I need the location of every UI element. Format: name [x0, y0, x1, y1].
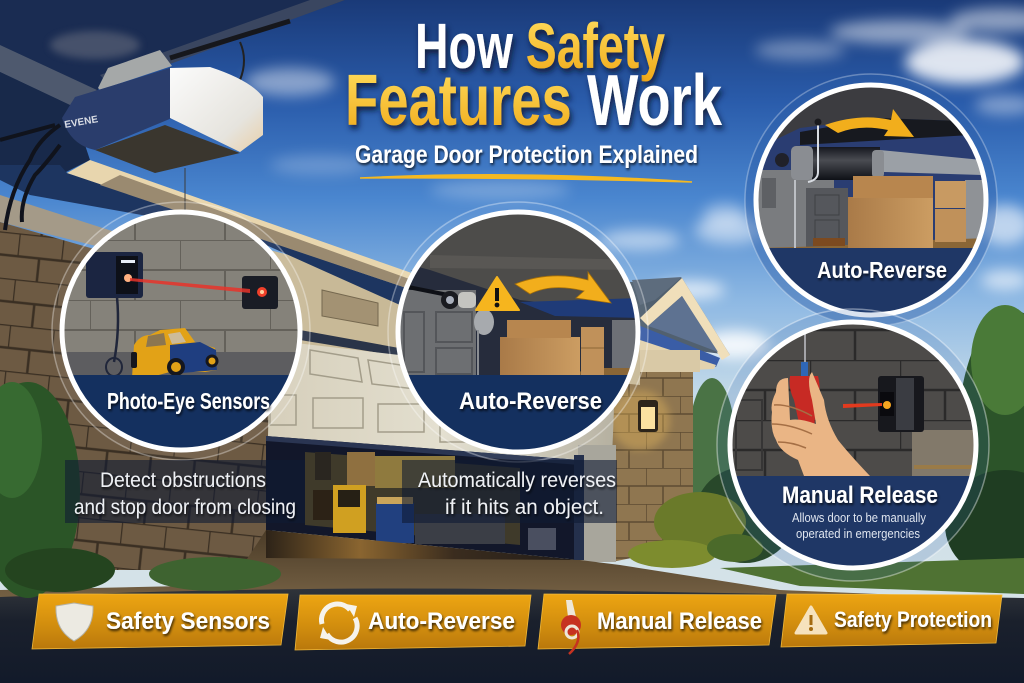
title line 1: How Safety	[415, 10, 665, 82]
description: manual release: operated in emergencies	[796, 526, 920, 541]
badge: auto-reverse	[295, 595, 531, 650]
panel: photo-eye sensors	[52, 202, 310, 460]
caption: auto-reverse: Automatically reverses	[418, 469, 616, 492]
panel: manual release	[717, 309, 989, 581]
label: photo-eye sensors: Photo-Eye Sensors	[107, 388, 270, 414]
title	[345, 10, 723, 182]
laser beam	[130, 278, 250, 293]
label band	[73, 375, 289, 448]
label: auto-reverse: Auto-Reverse	[817, 257, 947, 283]
subtitle: Garage Door Protection Explained	[355, 141, 698, 169]
icon: warning triangle	[476, 277, 519, 310]
icon: left photo-eye sensor	[86, 252, 143, 376]
garage door opener: EVENE	[64, 114, 99, 131]
garage door opener	[0, 21, 290, 230]
label: manual release: Manual Release	[782, 482, 938, 509]
icon: curved arrow	[515, 272, 611, 303]
icon: toy car	[131, 328, 218, 378]
opener drum	[775, 118, 884, 248]
label band	[770, 248, 972, 312]
trees behind house	[688, 305, 1024, 580]
badge: manual release: Manual Release	[597, 608, 762, 635]
description: manual release	[792, 510, 926, 541]
description: manual release: Allows door to be manually	[792, 510, 926, 525]
house: brick wall	[0, 222, 693, 570]
bushes and left tree	[0, 382, 763, 598]
icon: circular arrows	[320, 604, 357, 642]
wall lamp	[638, 400, 658, 432]
boxes	[848, 176, 966, 248]
icon: curved arrow	[825, 109, 914, 137]
badge: safety sensors: Safety Sensors	[106, 608, 270, 635]
badge: safety sensors	[32, 594, 288, 649]
badge: safety protection: Safety Protection	[834, 607, 992, 632]
panel: auto-reverse centre	[388, 202, 648, 462]
garage door	[268, 340, 615, 462]
badge: safety protection	[781, 594, 1002, 647]
label band	[736, 476, 970, 566]
badge: manual release	[538, 594, 776, 654]
icon: warning triangle	[796, 607, 826, 633]
opener rail	[408, 287, 494, 378]
caption: photo-eye sensors	[65, 460, 305, 523]
caption: auto-reverse: if it hits an object.	[445, 496, 604, 519]
caption: photo-eye sensors: and stop door from closing	[74, 496, 296, 519]
label: auto-reverse: Auto-Reverse	[459, 388, 602, 415]
badge: auto-reverse: Auto-Reverse	[368, 608, 515, 635]
title line 2: Features Work	[345, 61, 723, 141]
underline swoosh	[360, 175, 692, 182]
panel: auto-reverse upper right	[745, 74, 997, 326]
house: roof fascia and soffit	[0, 160, 440, 305]
icon: shield	[56, 603, 93, 641]
driveway and road	[0, 530, 1024, 683]
icon: right photo-eye sensor	[242, 276, 278, 309]
icon: hand with red handle	[772, 330, 870, 476]
caption: photo-eye sensors: Detect obstructions	[100, 469, 266, 492]
garage opening and interior	[266, 436, 616, 562]
caption: auto-reverse	[402, 460, 617, 523]
dark ceiling and beam, top left	[0, 0, 345, 175]
boxes	[500, 320, 604, 377]
label band	[408, 375, 628, 450]
icon: photo-eye sensor	[843, 376, 924, 432]
icon: red release handle	[561, 600, 581, 654]
house: upper wall and gable	[250, 245, 730, 385]
